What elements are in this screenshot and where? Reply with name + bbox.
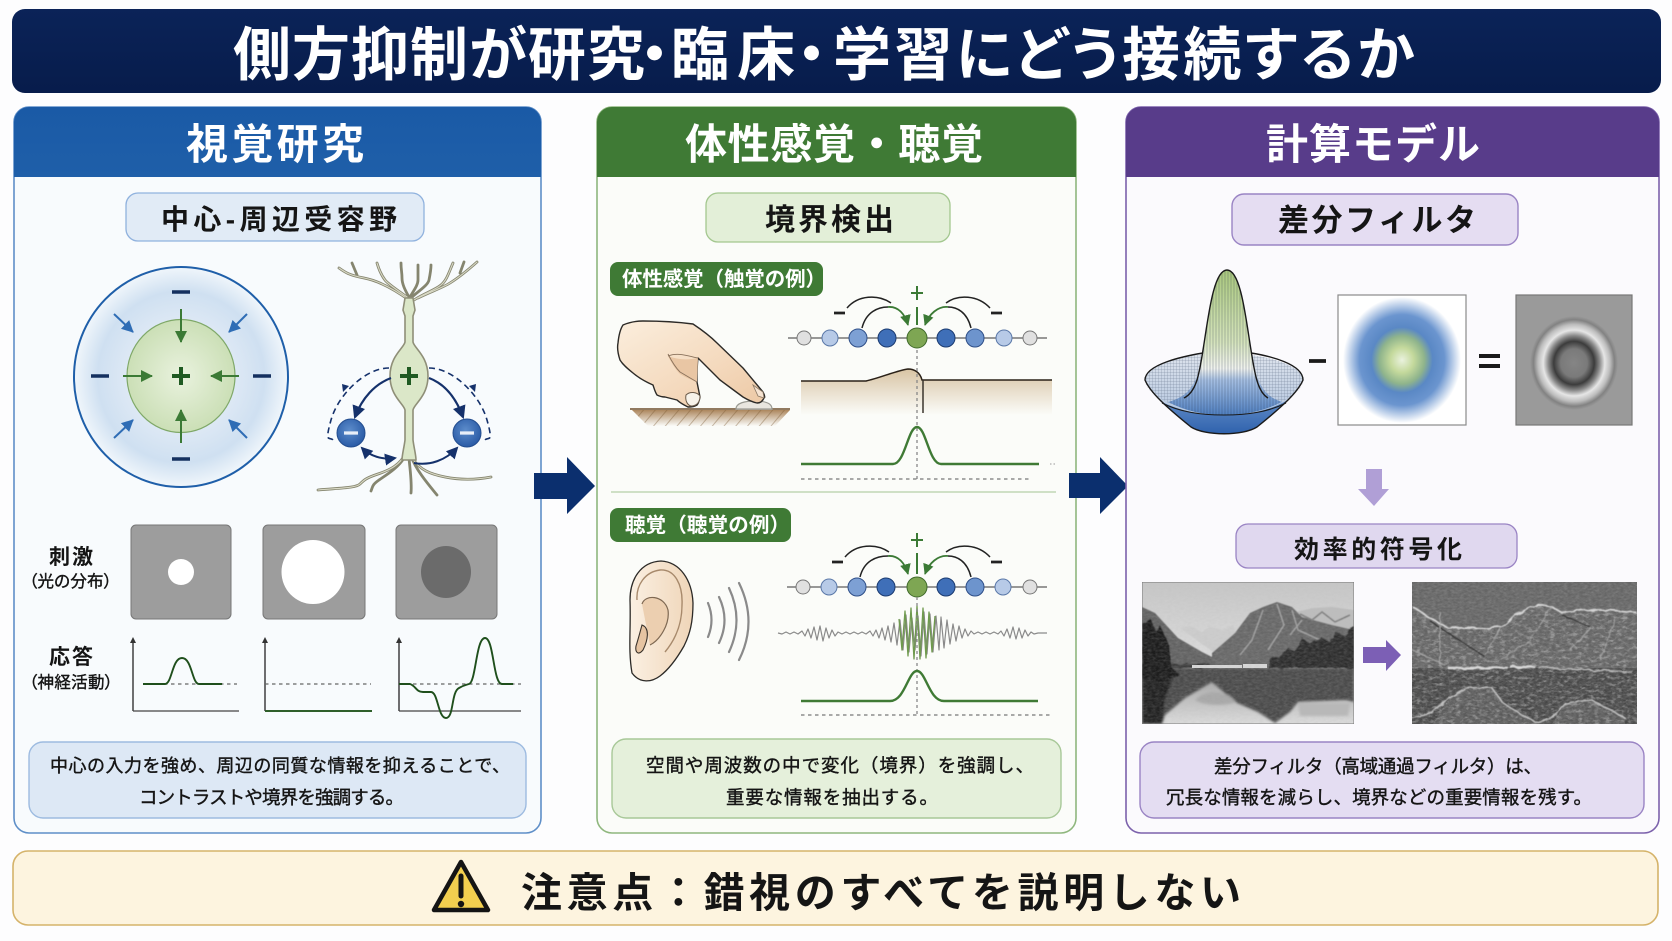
response plot 3: [396, 637, 521, 718]
tag: 聴覚（聴覚の例）: 聴覚（聴覚の例）: [625, 514, 790, 537]
panel header: 視覚研究: 視覚研究: [186, 121, 364, 168]
caution band: [13, 851, 1658, 925]
callout: visual research summary: [29, 742, 526, 818]
row label: 応答: [29, 645, 113, 692]
arrow: photo to filtered photo: [1363, 640, 1401, 671]
panel: 計算モデル: [1126, 107, 1659, 833]
panel header: 視覚研究: [14, 107, 541, 177]
neuron row: somatosensory lateral inhibition: [788, 286, 1047, 348]
response plot 1: [130, 637, 239, 711]
row label: 応答: （神経活動）: [29, 673, 113, 692]
skin deformation profile: [801, 369, 1052, 415]
title bar: [12, 9, 1661, 93]
subheading pill: 効率的符号化: 効率的符号化: [1294, 536, 1462, 564]
photo: edge-filtered mountain lake: [1412, 582, 1637, 724]
photo: grayscale mountain lake: [1142, 582, 1356, 724]
response curve: somatosensory: [801, 350, 1055, 479]
subheading pill: 中心-周辺受容野: 中心-周辺受容野: [161, 204, 397, 235]
stimulus: large bright disc: [263, 525, 365, 619]
title text: ・: [797, 23, 826, 88]
arrow: vision to somatosensory: [534, 457, 595, 514]
subheading pill: 効率的符号化: [1236, 524, 1517, 568]
callout: somatosensory and auditory summary: 重要な情報を抽出する。: [726, 787, 938, 808]
tag: 聴覚（聴覚の例）: [610, 508, 791, 542]
waveform: sound signal: [778, 606, 1047, 659]
icon: warning triangle: [434, 862, 488, 910]
subheading pill: 中心-周辺受容野: [126, 193, 424, 241]
title text: ・: [640, 23, 669, 88]
panel header: 計算モデル: 計算モデル: [1266, 121, 1480, 168]
arrow: down to efficient coding: [1358, 469, 1389, 506]
panel header: 体性感覚・聴覚: [597, 107, 1076, 177]
illustration: finger pressing on surface: [618, 321, 790, 426]
response curve: auditory: [801, 597, 1050, 715]
arrow: somatosensory to computational: [1069, 457, 1128, 514]
callout: somatosensory and auditory summary: [612, 739, 1061, 818]
callout: computational model summary: 冗長な情報を減らし、境界などの重要情報を残す。: [1166, 787, 1592, 808]
response plot 2: [262, 637, 372, 711]
callout: visual research summary: コントラストや境界を強調する。: [139, 787, 404, 808]
neuron row: auditory lateral inhibition: [787, 533, 1047, 597]
filter result image: ring: [1516, 295, 1632, 425]
stimulus: small bright spot: [131, 525, 231, 619]
diagram: center-surround receptive field: [74, 267, 288, 487]
callout: computational model summary: 差分フィルタ（高域通過フィルタ）は、: [1214, 756, 1542, 777]
title text: 側方抑制が研究: [233, 23, 646, 88]
tag: 体性感覚（触覚の例）: [610, 262, 826, 296]
callout: visual research summary: 中心の入力を強め、周辺の同質な情報を抑えることで、: [50, 756, 510, 776]
subheading pill: 境界検出: [706, 193, 950, 242]
illustration: ear: [630, 561, 693, 681]
subheading pill: 差分フィルタ: 差分フィルタ: [1278, 203, 1476, 238]
callout: computational model summary: [1140, 742, 1644, 818]
diagram: neuron with lateral inhibition: [318, 262, 491, 495]
filter image: blurred center-surround: [1338, 295, 1466, 425]
row label: 刺激: （光の分布）: [29, 572, 112, 591]
title text: 臨床: [671, 23, 803, 88]
subheading pill: 境界検出: 境界検出: [765, 204, 894, 237]
panel header: 体性感覚・聴覚: 体性感覚・聴覚: [685, 121, 983, 168]
row label: 刺激: [29, 546, 112, 591]
chart: 3D Mexican hat surface: [1145, 270, 1303, 434]
stimulus: dark disc: [396, 525, 497, 619]
row label: 応答: 応答: [49, 645, 93, 669]
panel header: 計算モデル: [1126, 107, 1659, 177]
title text: 学習にどう接続するか: [833, 23, 1418, 88]
icon: sound waves: [708, 583, 748, 660]
caution text: 注意点：錯視のすべてを説明しない: [521, 870, 1241, 916]
row label: 刺激: 刺激: [49, 546, 93, 569]
subheading pill: 差分フィルタ: [1232, 194, 1518, 245]
callout: somatosensory and auditory summary: 空間や周波数の中で変化（境界）を強調し、: [646, 755, 1034, 776]
panel: 視覚研究: [14, 107, 541, 833]
panel: 体性感覚・聴覚: [597, 107, 1076, 833]
tag: 体性感覚（触覚の例）: 体性感覚（触覚の例）: [622, 267, 826, 291]
